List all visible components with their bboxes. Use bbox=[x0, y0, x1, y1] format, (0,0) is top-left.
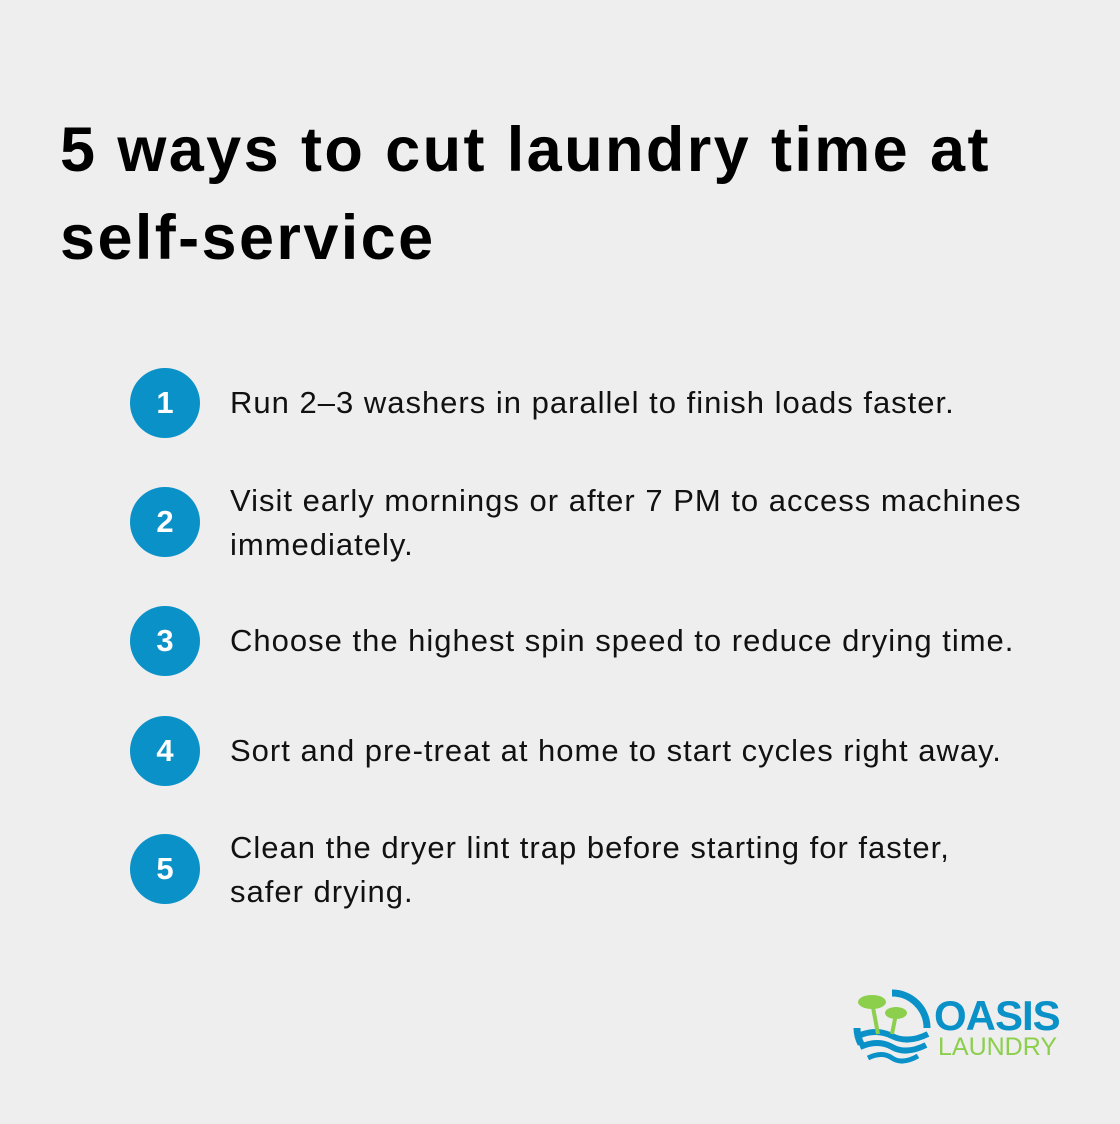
item 2: Visit early mornings or after 7 PM to access machines bbox=[230, 483, 1022, 518]
item 3 bbox=[130, 606, 1014, 676]
item 1 bbox=[130, 368, 955, 438]
item 2: immediately. bbox=[230, 527, 414, 562]
logo text: OASIS bbox=[934, 992, 1060, 1039]
title bbox=[60, 115, 991, 273]
logo bbox=[854, 990, 1060, 1064]
item 5: Clean the dryer lint trap before starting for faster, bbox=[230, 830, 950, 865]
item 5: 5 bbox=[156, 851, 174, 886]
item 2: 2 bbox=[156, 504, 174, 539]
item 2 bbox=[130, 483, 1022, 562]
item 4: 4 bbox=[156, 733, 174, 768]
item 3: 3 bbox=[156, 623, 174, 658]
title: 5 ways to cut laundry time at bbox=[60, 115, 991, 185]
item 5: safer drying. bbox=[230, 874, 414, 909]
item 1: 1 bbox=[156, 385, 174, 420]
item 5 bbox=[130, 830, 950, 909]
item 3: Choose the highest spin speed to reduce drying time. bbox=[230, 623, 1014, 658]
icon: palm circle bbox=[854, 990, 930, 1064]
title: self-service bbox=[60, 203, 436, 273]
logo: LAUNDRY bbox=[938, 1033, 1057, 1061]
item 4: Sort and pre-treat at home to start cycles right away. bbox=[230, 733, 1002, 768]
item 4 bbox=[130, 716, 1002, 786]
item 1: Run 2–3 washers in parallel to finish loads faster. bbox=[230, 385, 955, 420]
